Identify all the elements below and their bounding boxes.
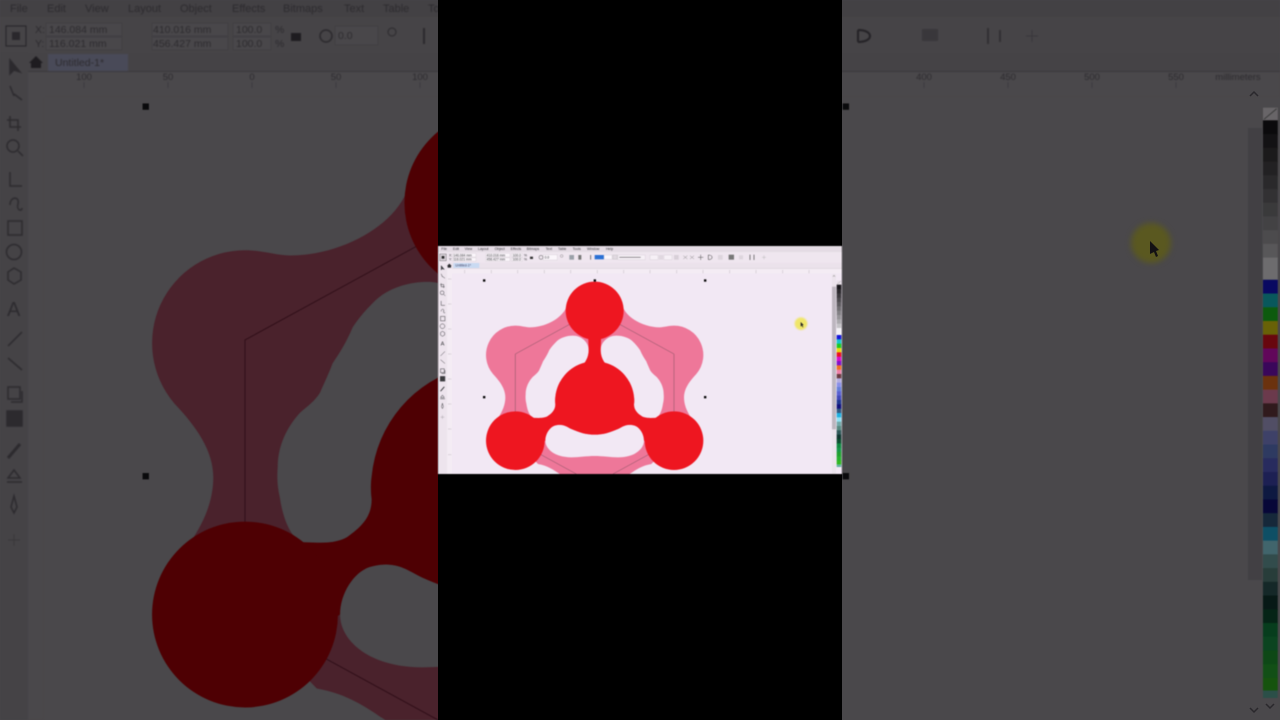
- background menu: To: [428, 3, 440, 15]
- background property bar: 116.021 mm: [49, 38, 107, 50]
- property bar: X:: [449, 253, 452, 257]
- menu bar: File: [441, 247, 447, 251]
- background ruler: 100: [76, 72, 92, 83]
- selection handles: [483, 279, 706, 398]
- background ruler: 500: [1084, 72, 1100, 83]
- menu bar: Bitmaps: [527, 247, 540, 251]
- outline width field: [595, 255, 604, 259]
- background cursor highlight: [1131, 223, 1171, 263]
- logo: [486, 282, 703, 474]
- property bar: 116.021 mm: [453, 258, 472, 262]
- background ruler: 550: [1168, 72, 1184, 83]
- rulers: [438, 263, 842, 474]
- chevron icons: [1250, 92, 1274, 712]
- pink hexagon shape: [152, 139, 841, 720]
- property bar: 100.0: [513, 258, 521, 262]
- property bar: [438, 252, 842, 263]
- background menu: Edit: [47, 3, 66, 15]
- menu bar: Layout: [478, 247, 489, 251]
- property bar: 0.0: [545, 256, 549, 260]
- menu bar: [438, 246, 842, 252]
- black centre band: [438, 0, 842, 720]
- background ruler: [76, 72, 1261, 83]
- menu bar: Text: [546, 247, 552, 251]
- menu bar: Help: [606, 247, 613, 251]
- background ruler: 450: [1000, 72, 1016, 83]
- background property bar: %: [275, 38, 284, 50]
- icon: home: [29, 56, 43, 68]
- background scrollbar: [1248, 128, 1262, 580]
- menu bar: Edit: [453, 247, 459, 251]
- document tab bar: Untitled-1*: [455, 264, 472, 268]
- red connecting shape: [253, 266, 739, 667]
- icon: home: [447, 264, 452, 268]
- background property bar: 456.427 mm: [153, 38, 212, 50]
- background ruler: 0: [249, 72, 255, 83]
- property bar: %: [524, 258, 527, 262]
- property bar: 410.016 mm: [487, 253, 505, 257]
- menu bar: Object: [495, 247, 505, 251]
- menu bar: View: [465, 247, 473, 251]
- background ruler: 400: [916, 72, 932, 83]
- background property bar: %: [275, 24, 284, 36]
- property bar: Y:: [449, 258, 452, 262]
- cursor highlight: [795, 317, 807, 330]
- menu bar: Table: [558, 247, 566, 251]
- top red circle: [566, 282, 624, 340]
- background property bar: 100.0: [236, 38, 262, 50]
- background menu: Effects: [232, 3, 266, 15]
- bottom left red circle: [486, 411, 545, 470]
- background property bar: 410.016 mm: [153, 24, 212, 36]
- background property bar: 0.0: [338, 30, 353, 42]
- property bar: 146.084 mm: [453, 253, 472, 257]
- document tab bar: [438, 263, 842, 268]
- background menu: View: [85, 3, 109, 15]
- page background: [438, 246, 842, 474]
- top red circle: [404, 111, 588, 295]
- colour palette: [837, 281, 841, 467]
- background toolbars: A: [7, 299, 21, 321]
- menu bar: Tools: [573, 247, 581, 251]
- background menu: Object: [180, 3, 212, 15]
- document tab: Untitled-1*: [55, 57, 104, 69]
- menu bar: Window: [587, 247, 600, 251]
- menu bar: Effects: [511, 247, 522, 251]
- red connecting shape: [518, 331, 671, 457]
- background menu: [10, 3, 440, 15]
- background property bar: Y:: [35, 38, 44, 50]
- foreground video: CorelDRAW window: [437, 245, 843, 475]
- background property bar: X:: [35, 24, 45, 36]
- property bar: 100.0: [513, 253, 521, 257]
- background menu: File: [10, 3, 28, 15]
- background ruler: 50: [331, 72, 341, 83]
- background menu: Bitmaps: [283, 3, 323, 15]
- background menu: Text: [344, 3, 364, 15]
- hexagon outline: [245, 203, 748, 720]
- background menu: Table: [383, 3, 409, 15]
- background logo: [143, 103, 849, 720]
- background property bar: 100.0: [236, 24, 262, 36]
- background property bar: 146.084 mm: [49, 24, 108, 36]
- background ruler: 50: [163, 72, 173, 83]
- property bar: 456.427 mm: [487, 258, 505, 262]
- background toolbox: [6, 60, 23, 546]
- background menu: Layout: [128, 3, 161, 15]
- bottom left red circle: [152, 522, 338, 707]
- toolbox: [440, 266, 445, 419]
- background colour palette: [1263, 108, 1278, 698]
- pink hexagon shape: [486, 291, 703, 474]
- property bar: %: [524, 253, 527, 257]
- scrollbar: [832, 274, 836, 474]
- background property bar: [6, 23, 1038, 50]
- selection handles: [143, 103, 849, 479]
- background ruler: millimeters: [1215, 72, 1261, 83]
- background ruler: 100: [412, 72, 428, 83]
- bottom right red circle: [655, 522, 841, 707]
- hexagon outline: [515, 311, 674, 474]
- bottom right red circle: [645, 411, 703, 470]
- text tool: A: [441, 342, 445, 348]
